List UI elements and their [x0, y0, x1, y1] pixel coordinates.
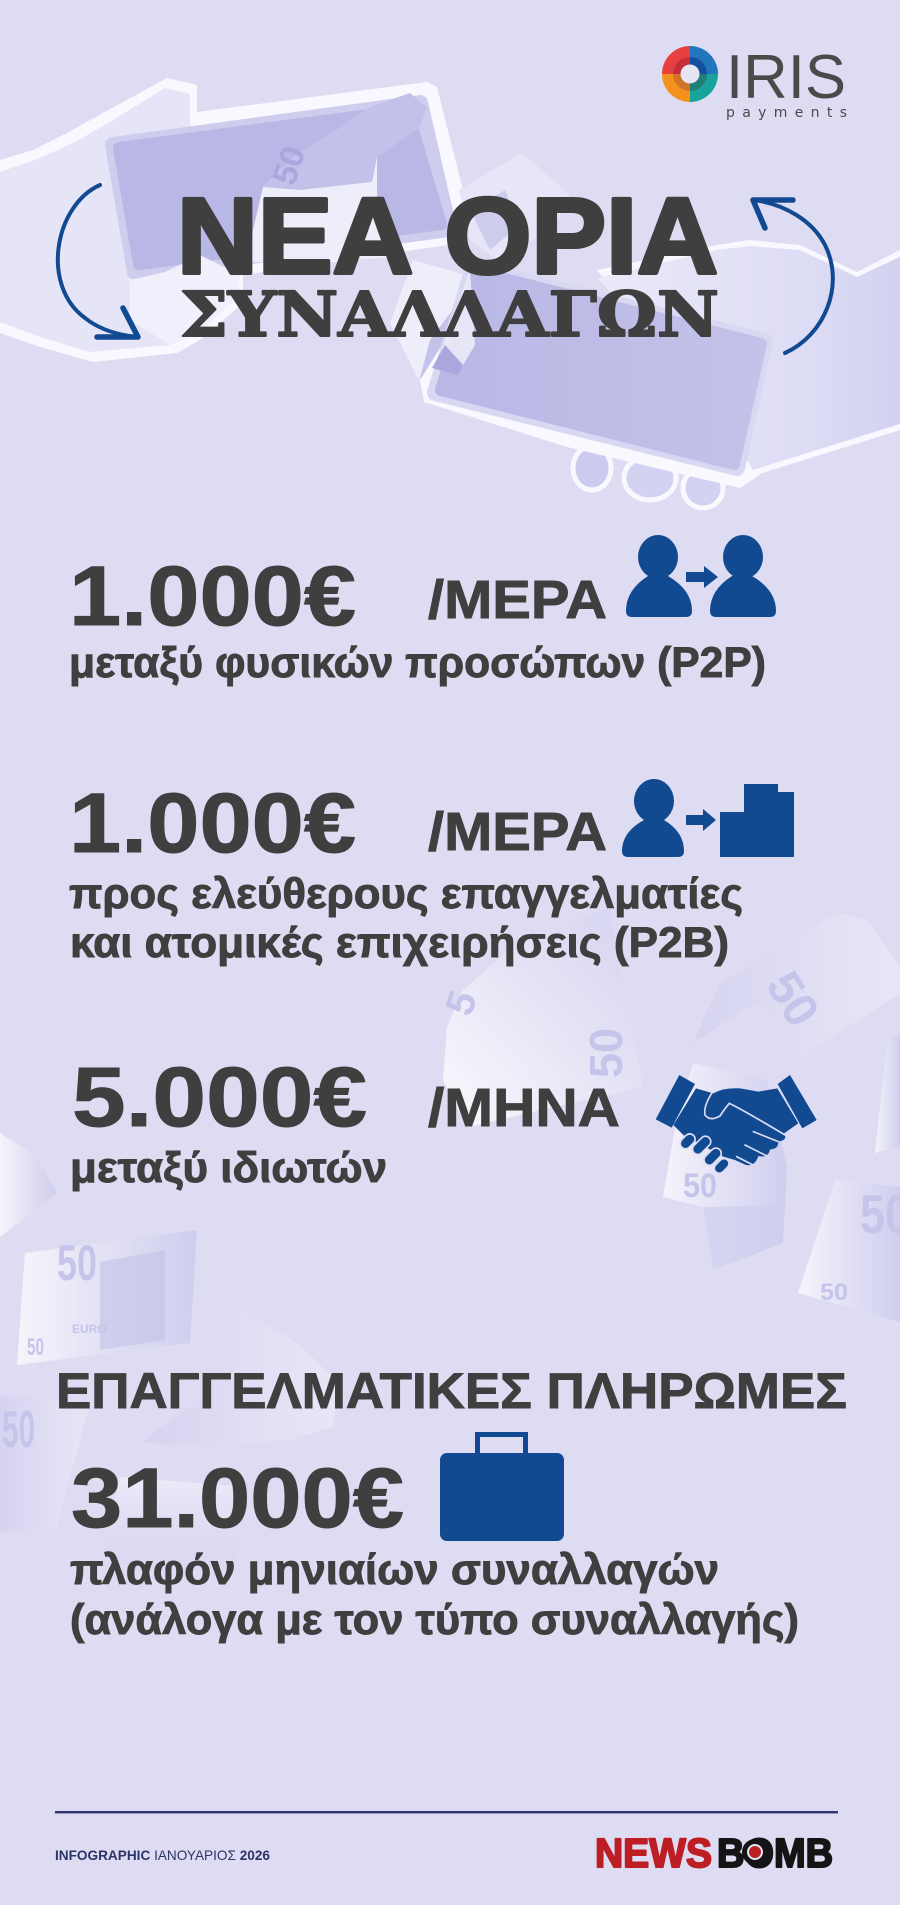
title — [177, 175, 719, 351]
limit 3: between individuals: μεταξύ ιδιωτών — [70, 1144, 387, 1192]
limit 1: P2P: /ΜΕΡΑ — [428, 570, 607, 630]
limit 2: P2B: προς ελεύθερους επαγγελματίες — [69, 870, 743, 918]
limit 3: between individuals: 5.000€ — [72, 1050, 367, 1144]
limit 4: monthly cap: πλαφόν μηνιαίων συναλλαγών — [70, 1546, 719, 1594]
limit 4: monthly cap: 31.000€ — [71, 1451, 404, 1545]
icon: person to business — [622, 779, 794, 857]
illustration: falling euro banknotes: 50 — [756, 963, 829, 1036]
heading: professional payments: ΕΠΑΓΓΕΛΜΑΤΙΚΕΣ ΠΛΗΡΩΜΕΣ — [56, 1363, 847, 1419]
footer credit: INFOGRAPHIC ΙΑΝΟΥΑΡΙΟΣ 2026 — [55, 1847, 270, 1863]
limit 1: P2P: 1.000€ — [69, 549, 356, 643]
limit 2: P2B: 1.000€ — [69, 776, 356, 870]
logo: IRIS payments — [662, 43, 847, 121]
icon: handshake — [656, 1075, 817, 1175]
illustration: falling euro banknotes: 50 — [2, 1401, 35, 1459]
illustration: left hand holding phone: 50 — [265, 142, 313, 189]
limit 1: P2P — [69, 535, 776, 687]
title: ΣΥΝΑΛΛΑΓΩΝ — [180, 278, 719, 351]
title: ΝΕΑ ΟΡΙΑ — [177, 175, 718, 296]
logo: NEWSBOMB: BOMB — [717, 1830, 833, 1876]
limit 1: P2P: μεταξύ φυσικών προσώπων (P2P) — [69, 639, 766, 687]
logo: NEWSBOMB: NEWS — [595, 1830, 712, 1876]
limit 4: monthly cap — [70, 1432, 799, 1644]
arrow: left curved arrow — [58, 185, 138, 337]
footer — [55, 1811, 838, 1876]
arrow: right curved arrow — [753, 200, 833, 353]
limit 3: between individuals: /ΜΗΝΑ — [428, 1078, 620, 1138]
icon: person to person — [626, 535, 776, 617]
illustration: right hand holding phone — [420, 240, 900, 508]
icon: briefcase — [440, 1432, 564, 1541]
illustration: left hand holding phone — [0, 78, 473, 380]
limit 4: monthly cap: (ανάλογα με τον τύπο συναλλαγής) — [70, 1596, 799, 1644]
illustration: falling euro banknotes: 50 — [820, 1279, 848, 1306]
illustration: falling euro banknotes: 50 — [580, 1028, 632, 1078]
illustration: banknote between the phones — [459, 153, 570, 262]
limit 3: between individuals — [70, 1050, 817, 1192]
limit 2: P2B: και ατομικές επιχειρήσεις (P2B) — [70, 919, 729, 967]
illustration: falling euro banknotes: 50 — [27, 1334, 44, 1361]
illustration: falling euro banknotes — [0, 907, 900, 1570]
limit 2: P2B: /ΜΕΡΑ — [428, 802, 607, 862]
illustration: falling euro banknotes: 50 — [57, 1235, 97, 1291]
logo: IRIS payments: IRIS — [726, 43, 846, 112]
illustration: falling euro banknotes: EURO — [72, 1322, 107, 1336]
logo: NEWSBOMB — [595, 1830, 833, 1876]
illustration: falling euro banknotes: 5 — [437, 985, 486, 1021]
limit 2: P2B — [69, 776, 794, 967]
illustration: falling euro banknotes: 50 — [683, 1167, 717, 1205]
logo: IRIS payments: payments — [726, 105, 847, 121]
